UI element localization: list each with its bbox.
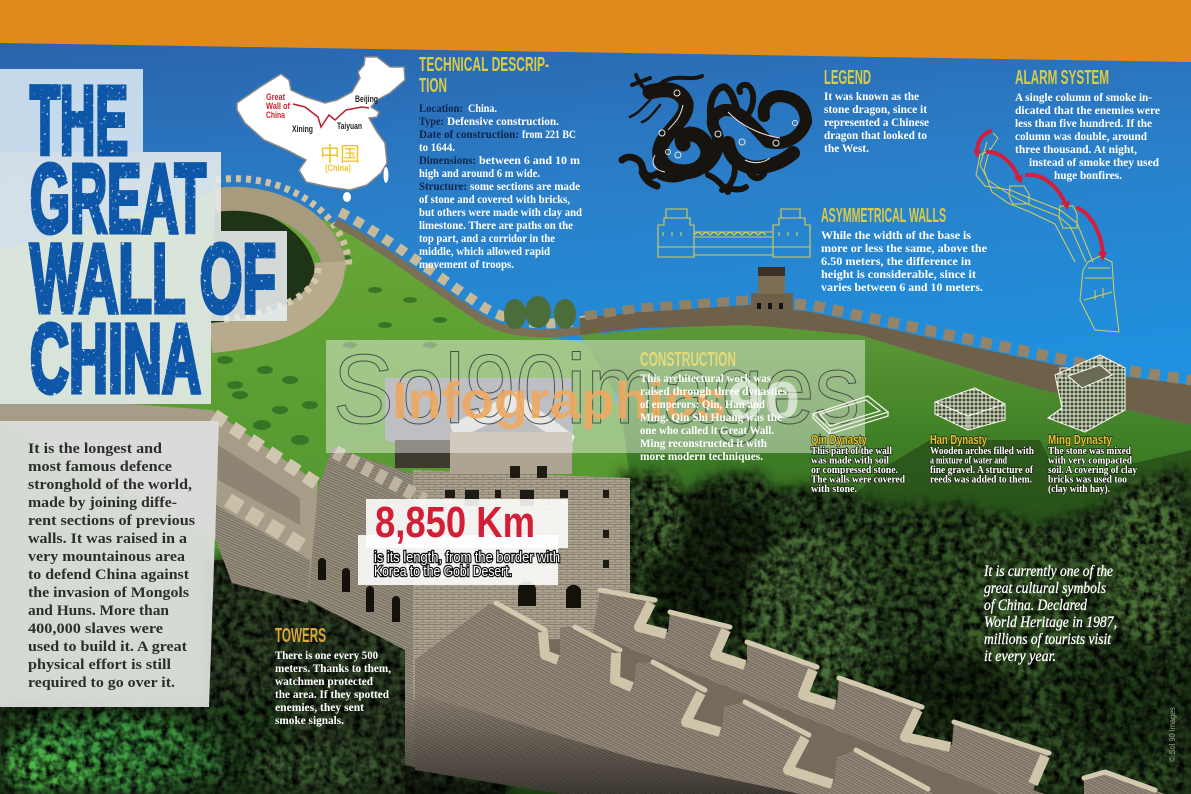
construction (640, 349, 788, 463)
asymmetrical walls: 6.50 meters, the difference in (821, 256, 972, 268)
intro panel: required to go over it. (28, 675, 175, 691)
Qin dynasty: This part of the wall (811, 446, 892, 457)
Ming dynasty: bricks was used too (1048, 474, 1127, 486)
sky background (0, 30, 1191, 450)
technical description: China. (468, 103, 497, 115)
scene: distant watch tower (751, 267, 793, 326)
construction: of emperors: Qin, Han and (640, 399, 766, 411)
alarm system: three thousand. At night, (1015, 144, 1137, 156)
alarm system: instead of smoke they used (1029, 157, 1160, 169)
Han dynasty: Wooden arches filled with (930, 446, 1034, 457)
alarm system (1015, 67, 1160, 182)
scene: front wall walkway (540, 637, 1000, 794)
towers: enemies, they sent (275, 702, 364, 714)
scene: shadows on hill (830, 440, 1191, 560)
technical description: to 1644. (419, 142, 455, 154)
callout: length of the wall: is its length, from the border with (374, 549, 560, 566)
intro panel: to defend China against (28, 567, 189, 583)
technical description: Type: (419, 116, 444, 128)
construction: raised through three dynasties (640, 386, 788, 398)
intro panel: made by joining diffe- (28, 495, 177, 511)
icon: asymmetrical wall sketch (658, 209, 810, 257)
intro panel: physical effort is still (28, 657, 171, 673)
map of China: Beijing (355, 94, 378, 104)
technical description: between 6 and 10 m (479, 155, 580, 167)
scene: curved distant wall (211, 179, 349, 338)
alarm system: huge bonfires. (1054, 170, 1122, 182)
heritage note: it every year. (984, 648, 1056, 665)
scene: main tower (308, 378, 630, 770)
Ming dynasty (1048, 432, 1137, 495)
technical description: Defensive construction. (447, 116, 559, 128)
callout: length of the wall: Korea to the Gobi Desert. (374, 563, 512, 580)
technical description: Structure: (419, 181, 467, 193)
asymmetrical walls: more or less the same, above the (821, 243, 987, 255)
intro panel: the invasion of Mongols (28, 585, 189, 601)
map of China: Taiyuan (337, 121, 362, 131)
icon: Ming wall layer (1048, 355, 1125, 432)
technical description: Location: (419, 103, 463, 115)
technical description: Date of construction: (419, 129, 519, 141)
Ming dynasty: with very compacted (1048, 456, 1132, 466)
heritage note: It is currently one of the (983, 563, 1113, 580)
callout: length of the wall (358, 498, 568, 585)
Ming dynasty: Ming Dynasty (1048, 432, 1113, 447)
scene: front wall back battlement row (590, 590, 1165, 794)
heritage note: millions of tourists visit (984, 631, 1111, 648)
intro panel: and Huns. More than (28, 603, 170, 619)
Qin dynasty (811, 432, 905, 495)
towers (275, 625, 391, 727)
orange top band (0, 0, 1191, 62)
alarm system: dicated that the enemies were (1015, 105, 1160, 117)
Han dynasty: a mixture of water and (930, 456, 1007, 466)
map of China: (China) (325, 163, 351, 173)
map of China: 中国 (320, 138, 360, 167)
legend: LEGEND (824, 67, 871, 89)
alarm system: less than five hundred. If the (1015, 118, 1152, 130)
technical description: some sections are made (470, 181, 580, 193)
asymmetrical walls (821, 205, 987, 294)
technical description: but others were made with clay and (419, 207, 583, 219)
heritage note: World Heritage in 1987, (984, 614, 1117, 631)
title (30, 66, 276, 413)
Qin dynasty: was made with soil (811, 456, 889, 466)
scene: wall stone tops (496, 590, 1155, 790)
technical description: of stone and covered with bricks, (419, 194, 570, 206)
intro panel: walls. It was raised in a (28, 531, 188, 547)
towers: watchmen protected (275, 676, 374, 688)
technical description: limestone. There are paths on the (419, 220, 573, 232)
towers: TOWERS (275, 625, 326, 647)
Qin dynasty: The walls were covered (811, 474, 905, 486)
intro panel (0, 421, 219, 707)
construction: more modern techniques. (640, 451, 763, 463)
map of China: China (266, 110, 286, 120)
intro panel: very mountainous area (28, 549, 186, 565)
legend: stone dragon, since it (824, 104, 927, 116)
technical description: TION (419, 75, 447, 97)
left title panels (0, 69, 287, 404)
scene: lower-left foliage backing (0, 560, 505, 794)
callout: length of the wall: 8,850 Km (375, 498, 535, 547)
technical description: high and around 6 m wide. (419, 168, 540, 180)
title: THE (30, 66, 128, 175)
scene: wall lit notches (543, 603, 1045, 784)
credit: © Sol 90 Images (1168, 707, 1177, 762)
watermark panel: 90 (728, 372, 800, 430)
watermark panel: Sol90images (333, 334, 860, 444)
legend: the West. (824, 143, 869, 155)
construction: Ming reconstructed it with (640, 438, 768, 450)
scene: forest backing (600, 520, 1191, 794)
technical description: top part, and a corridor in the (419, 233, 555, 245)
watermark panel: Infographics (392, 372, 726, 430)
construction: one who called it Great Wall. (640, 425, 774, 437)
intro panel: It is the longest and (28, 441, 163, 457)
technical description: Dimensions: (419, 155, 476, 167)
alarm system: ALARM SYSTEM (1015, 67, 1109, 89)
scene: front wall front battlement row (415, 603, 935, 794)
construction: CONSTRUCTION (640, 349, 736, 371)
technical description: middle, which allowed rapid (419, 246, 551, 258)
Han dynasty: fine gravel. A structure of (930, 465, 1034, 476)
towers: smoke signals. (275, 715, 344, 727)
intro panel: most famous defence (28, 459, 172, 475)
towers: meters. Thanks to them, (275, 663, 391, 675)
heritage note (983, 563, 1117, 665)
legend (824, 67, 929, 155)
technical description: movement of troops. (419, 259, 514, 271)
scene: distant trees (504, 296, 576, 329)
scene: left hill (0, 190, 640, 794)
scene: left walkway wall (0, 404, 320, 603)
construction: This architectural work was (640, 373, 771, 385)
Ming dynasty: The stone was mixed (1048, 446, 1131, 457)
scene: forest (590, 465, 1191, 794)
scene: far wall descending from left (335, 212, 590, 333)
asymmetrical walls: varies between 6 and 10 meters. (821, 282, 983, 294)
scene: right green hill (580, 322, 1191, 560)
alarm system: A single column of smoke in- (1015, 92, 1152, 104)
legend: It was known as the (824, 91, 919, 103)
scene: wall lower shading (405, 690, 800, 794)
icon: dragon (622, 75, 806, 192)
Han dynasty: Han Dynasty (930, 432, 988, 447)
asymmetrical walls: While the width of the base is (821, 230, 972, 242)
intro panel: stronghold of the world, (28, 477, 192, 493)
towers: the area. If they spotted (275, 689, 390, 701)
scene: far wall running right (580, 300, 1191, 425)
intro panel: rent sections of previous (28, 513, 195, 529)
alarm system: column was double, around (1015, 131, 1148, 143)
asymmetrical walls: height is considerable, since it (821, 269, 976, 281)
icon: wall sketch with signal arrows (973, 131, 1119, 332)
legend: dragon that looked to (824, 130, 927, 142)
Han dynasty (930, 432, 1034, 486)
technical description: TECHNICAL DESCRIP- (419, 54, 549, 76)
intro panel: used to build it. A great (28, 639, 187, 655)
map of China: Great (266, 92, 285, 102)
heritage note: of China. Declared (984, 597, 1088, 614)
title: WALL OF (30, 224, 276, 333)
Qin dynasty: Qin Dynasty (811, 432, 868, 447)
map of China (237, 57, 405, 202)
towers: There is one every 500 (275, 650, 378, 662)
map of China: Wall of (266, 101, 291, 111)
title: GREAT (30, 144, 206, 253)
scene: lower-left foliage (0, 560, 505, 794)
Han dynasty: reeds was added to them. (930, 474, 1032, 486)
intro panel: 400,000 slaves were (28, 621, 163, 637)
Ming dynasty: soil. A covering of clay (1048, 465, 1137, 476)
technical description: from 221 BC (522, 129, 576, 141)
legend: represented a Chinese (824, 117, 929, 129)
Qin dynasty: with stone. (811, 484, 857, 495)
technical description (419, 54, 583, 271)
asymmetrical walls: ASYMMETRICAL WALLS (821, 205, 946, 227)
Qin dynasty: or compressed stone. (811, 465, 898, 476)
heritage note: great cultural symbols (984, 580, 1106, 597)
map of China: Xining (292, 124, 313, 134)
title: CHINA (30, 304, 201, 413)
construction: Ming. Qin Shi Huang was the (640, 412, 782, 424)
icon: Qin wall layer (813, 396, 888, 434)
icon: Han wall layer (935, 388, 1005, 430)
Ming dynasty: (clay with hay). (1048, 484, 1110, 495)
